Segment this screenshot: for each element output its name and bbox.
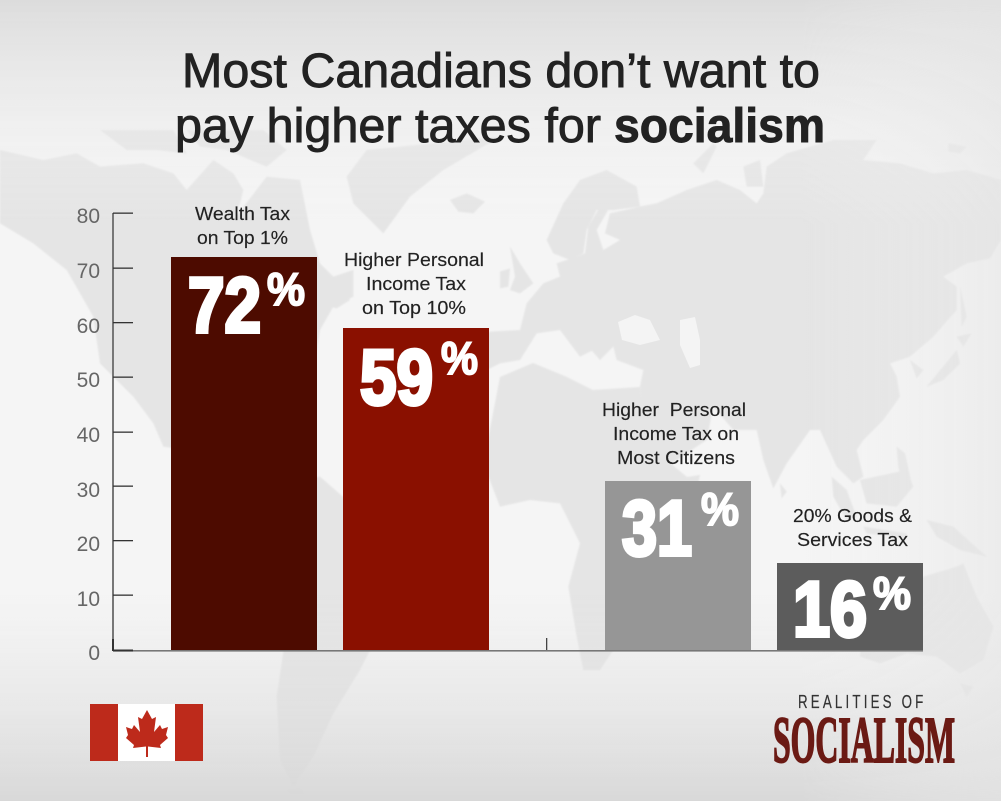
label: goods and services tax xyxy=(793,505,913,550)
value: 59%: 59 xyxy=(360,333,433,421)
logo: realities of socialism: REALITIES OF xyxy=(798,692,923,713)
value: 16%: % xyxy=(873,567,911,619)
value: 72%: 72 xyxy=(188,261,261,349)
bar: top 10% income tax 59% xyxy=(343,249,489,650)
value: 72%: % xyxy=(267,263,305,315)
title: socialism xyxy=(614,100,825,153)
bar: most citizens income tax 31% xyxy=(602,399,751,650)
y axis labels: 0 xyxy=(88,642,100,665)
label: income tax on top 10% xyxy=(344,249,484,318)
icon: canadian flag xyxy=(90,704,203,761)
y axis labels: 60 xyxy=(77,315,100,338)
label: wealth tax: Wealth Tax xyxy=(195,203,291,224)
label: income tax on top 10%: on Top 10% xyxy=(362,297,466,318)
chart axes xyxy=(112,212,923,652)
label: income tax on top 10%: Income Tax xyxy=(366,273,467,294)
title: pay higher taxes for xyxy=(175,100,601,153)
y axis labels: 20 xyxy=(77,533,100,556)
label: income tax on top 10%: Higher Personal xyxy=(344,249,484,270)
label: wealth tax xyxy=(195,203,291,248)
label: goods and services tax: Services Tax xyxy=(797,529,909,550)
title xyxy=(175,45,825,153)
label: wealth tax: on Top 1% xyxy=(197,227,288,248)
value: 59%: % xyxy=(441,332,478,384)
y axis labels: 70 xyxy=(77,260,100,283)
y axis labels xyxy=(77,205,100,665)
value: 16%: 16 xyxy=(793,565,867,653)
value: 31%: % xyxy=(701,483,739,535)
y axis labels: 40 xyxy=(77,424,100,447)
label: goods and services tax: 20% Goods & xyxy=(793,505,913,526)
y axis labels: 80 xyxy=(77,205,100,228)
y axis labels: 10 xyxy=(77,588,100,611)
label: income tax on most citizens: Higher Personal xyxy=(602,399,746,420)
value: 31%: 31 xyxy=(622,484,692,572)
y axis labels: 50 xyxy=(77,369,100,392)
y axis labels: 30 xyxy=(77,479,100,502)
title: Most Canadians don’t want to xyxy=(182,45,820,98)
inland seas xyxy=(618,315,700,368)
label: income tax on most citizens xyxy=(602,399,746,468)
label: income tax on most citizens: Income Tax on xyxy=(613,423,739,444)
bar: goods and services tax 16% xyxy=(777,505,923,653)
label: income tax on most citizens: Most Citizens xyxy=(617,447,735,468)
bar: wealth tax 72% xyxy=(171,203,317,650)
